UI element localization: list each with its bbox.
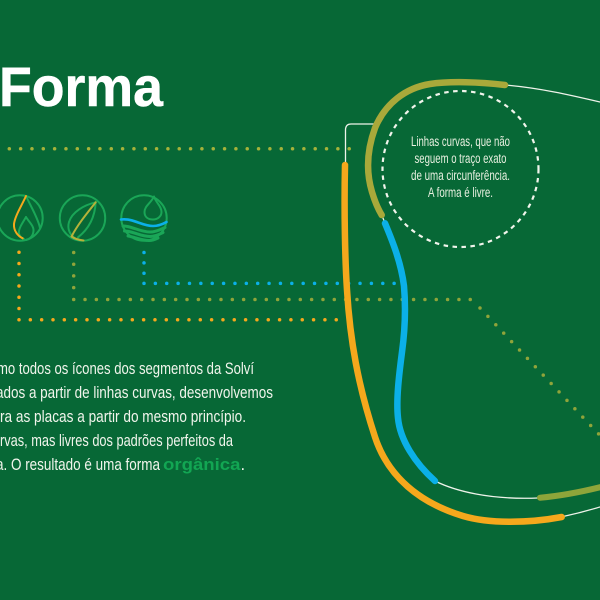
dotted connector: olive xyxy=(74,252,600,446)
dashed circle callout xyxy=(382,91,538,247)
icon: water drop and waves xyxy=(121,195,167,241)
icon: leaf xyxy=(60,195,105,241)
thin white connecting lines xyxy=(346,85,600,517)
callout text: Linhas curvas, que não xyxy=(411,134,510,149)
organic shape outline xyxy=(345,82,600,522)
text block: description xyxy=(0,360,273,474)
icon: flame xyxy=(0,195,43,241)
dotted connector: orange xyxy=(19,252,339,320)
blue curve segment xyxy=(385,223,435,481)
callout text xyxy=(411,134,510,200)
olive curve segment xyxy=(368,82,505,215)
orange curve segment xyxy=(345,165,562,522)
text block: description: . xyxy=(240,456,245,474)
callout text: de uma circunferência. xyxy=(411,168,510,183)
text block: description: orgânica xyxy=(163,456,241,474)
text block: description: mo todos os ícones dos segmentos da Solví xyxy=(0,360,254,378)
title: Forma xyxy=(0,55,164,118)
callout text: seguem o traço exato xyxy=(414,151,506,166)
text block: description: rvas, mas livres dos padrões perfeitos da xyxy=(0,432,234,450)
green curve segment xyxy=(540,486,600,498)
text block: description: ra as placas a partir do mesmo princípio. xyxy=(0,408,246,426)
dotted connector: top line to shape xyxy=(9,147,360,150)
text block: description: a. O resultado é uma forma xyxy=(0,456,161,474)
callout text: A forma é livre. xyxy=(428,185,493,200)
dotted connector: blue xyxy=(144,252,396,283)
text block: description: ados a partir de linhas curvas, desenvolvemos xyxy=(0,384,273,402)
